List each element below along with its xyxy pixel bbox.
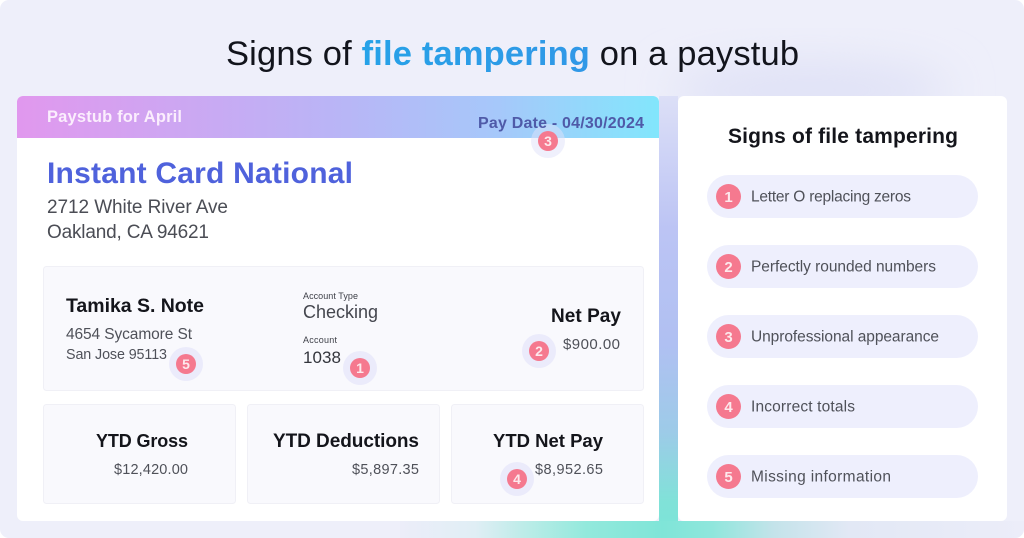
- panel: paystub: [17, 96, 659, 521]
- panel: YTD deductions: [248, 404, 440, 504]
- marker 3: 3: [544, 133, 552, 149]
- panel: employee details: [44, 266, 644, 390]
- marker 5: 5: [182, 356, 190, 372]
- employee address: 4654 Sycamore St: [66, 326, 193, 343]
- panel: YTD gross: $12,420.00: [114, 462, 188, 478]
- list item 4: [707, 385, 978, 428]
- account number: Account: [303, 335, 337, 345]
- header label: Paystub for April: [47, 108, 182, 126]
- account type: Checking: [303, 302, 378, 322]
- pay date: Pay Date - 04/30/2024: [478, 115, 644, 132]
- list item 4: 4: [724, 399, 733, 416]
- employee address: San Jose 95113: [66, 347, 167, 363]
- panel: YTD net pay: $8,952.65: [535, 462, 603, 478]
- list item 3: 3: [724, 329, 733, 346]
- net pay: [551, 306, 621, 353]
- marker 4: 4: [513, 471, 521, 487]
- list item 2: Perfectly rounded numbers: [751, 258, 936, 276]
- panel: YTD deductions: $5,897.35: [352, 462, 419, 478]
- panel: YTD gross: [44, 404, 236, 504]
- title: Signs of file tampering on a paystub: [226, 35, 799, 73]
- account number: [303, 335, 341, 367]
- list item 4: Incorrect totals: [751, 398, 855, 416]
- net pay: Net Pay: [551, 306, 621, 327]
- list item 2: 2: [724, 259, 733, 276]
- account number: 1038: [303, 348, 341, 367]
- list item 1: 1: [724, 189, 733, 206]
- list item 5: [707, 455, 978, 498]
- panel: YTD net pay: YTD Net Pay: [493, 430, 604, 451]
- list item 5: 5: [724, 469, 733, 486]
- marker 4: [500, 462, 534, 496]
- list item 2: [707, 245, 978, 288]
- marker 1: [343, 351, 377, 385]
- marker 2: [522, 334, 556, 368]
- employee address: [66, 326, 193, 363]
- list item 1: Letter O replacing zeros: [751, 188, 911, 206]
- employee name: Tamika S. Note: [66, 295, 204, 317]
- list item 3: Unprofessional appearance: [751, 328, 939, 346]
- company address: 2712 White River Ave: [47, 197, 228, 218]
- paystub header band: [17, 96, 659, 138]
- panel: YTD gross: YTD Gross: [96, 431, 188, 451]
- company address: [47, 197, 228, 243]
- panel: YTD deductions: YTD Deductions: [273, 431, 419, 452]
- list item 3: [707, 315, 978, 358]
- marker 3: [531, 124, 565, 158]
- marker 1: 1: [356, 360, 364, 376]
- list item 5: Missing information: [751, 468, 891, 486]
- list item 1: [707, 175, 978, 218]
- net pay: $900.00: [563, 336, 620, 353]
- panel: YTD net pay: [452, 404, 644, 504]
- account type: Account Type: [303, 291, 358, 301]
- account type: [303, 291, 378, 322]
- panel: signs list: [678, 96, 1007, 521]
- marker 2: 2: [535, 343, 543, 359]
- company address: Oakland, CA 94621: [47, 222, 209, 243]
- marker 5: [169, 347, 203, 381]
- list heading: Signs of file tampering: [728, 125, 958, 148]
- company name: Instant Card National: [47, 157, 353, 190]
